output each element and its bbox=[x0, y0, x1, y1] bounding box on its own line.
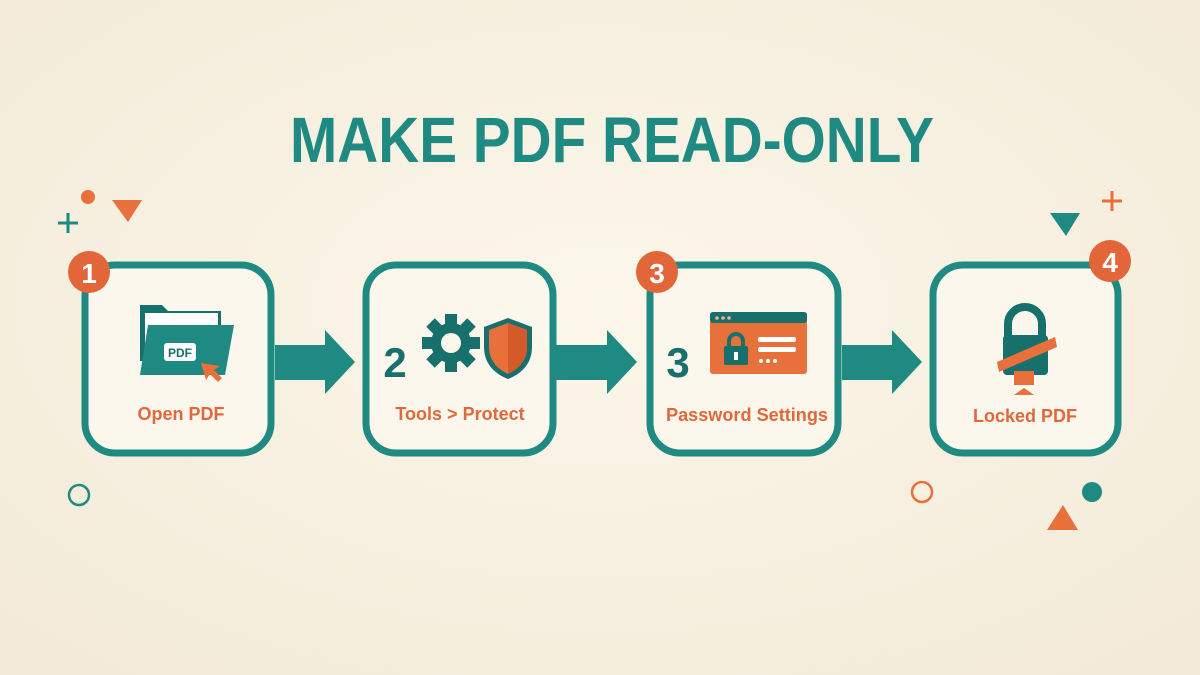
icon: folder with PDF bbox=[140, 305, 234, 382]
step 3 card bbox=[650, 265, 838, 453]
label: Password Settings bbox=[666, 405, 828, 425]
arrow 2 bbox=[556, 330, 637, 394]
step 1 card bbox=[85, 265, 271, 453]
icon: shield bbox=[484, 318, 532, 379]
label: Open PDF bbox=[137, 404, 225, 424]
badge 4: 4 bbox=[1102, 247, 1118, 278]
step 4 card bbox=[933, 265, 1118, 453]
label: Locked PDF bbox=[973, 406, 1077, 426]
arrow 3 bbox=[842, 330, 922, 394]
badge 4 bbox=[1089, 240, 1131, 282]
label: Tools > Protect bbox=[395, 404, 525, 424]
icon: folder with PDF: PDF bbox=[168, 346, 192, 360]
arrow 1 bbox=[275, 330, 355, 394]
number 2: 2 bbox=[383, 339, 407, 386]
title: MAKE PDF READ-ONLY bbox=[290, 104, 934, 176]
badge 1: 1 bbox=[81, 258, 97, 289]
step 2 card bbox=[366, 265, 553, 453]
decorative shapes left bbox=[58, 190, 142, 505]
decorative shapes right bbox=[912, 191, 1122, 530]
icon: locked PDF with ribbon bbox=[997, 307, 1057, 395]
badge 3 bbox=[636, 251, 678, 293]
badge 3: 3 bbox=[649, 258, 665, 289]
badge 1 bbox=[68, 251, 110, 293]
icon: gear bbox=[410, 302, 492, 384]
number 3: 3 bbox=[666, 339, 690, 386]
icon: password window bbox=[710, 312, 807, 374]
